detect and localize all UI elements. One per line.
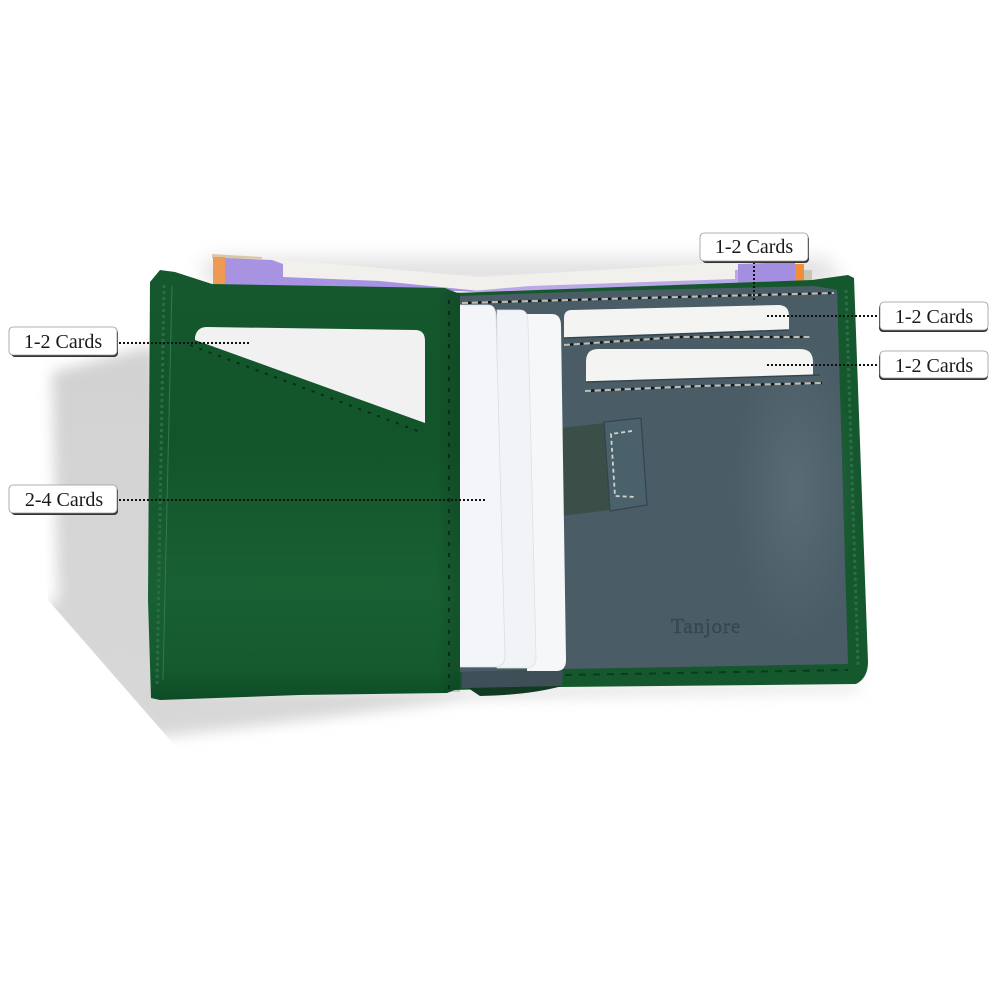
first card [458,305,505,667]
third card [527,314,566,671]
right stitching [846,290,858,665]
callout: right upper: 1-2 Cards [895,306,973,328]
note: cream edge [212,254,262,259]
suede band [562,423,610,516]
dark green lip [468,686,562,696]
left card [195,327,425,423]
callout: right lower: 1-2 Cards [895,355,973,377]
flap shape [148,270,460,700]
callout: left lower: 2-4 Cards [25,489,103,511]
fold shade [370,292,460,692]
pocket stitching [190,345,423,433]
brand emboss: Tanjore [671,614,741,638]
upper card [564,305,789,338]
leader line [753,262,755,300]
callout: left upper [9,327,249,357]
lining highlight [733,340,857,640]
callout: left upper: 1-2 Cards [24,331,102,353]
lower pocket edge [586,375,820,382]
note: purple right pattern [738,262,795,290]
callout: top: 1-2 Cards [715,236,793,258]
bottom strip [462,669,563,688]
note: white paper [225,257,800,292]
second card [497,310,536,668]
left seam highlight [163,286,172,680]
note: orange edge [213,257,225,288]
tab stitching [611,431,636,497]
banknotes [212,254,812,292]
callout: right upper [767,302,988,332]
bottom stitching [565,670,848,675]
note: grey right edge [804,270,812,290]
drop shadow [40,345,470,738]
top stitching [462,293,834,303]
top shadow glow [205,258,845,285]
elastic tab [562,418,647,516]
lower slot stitching [585,383,822,391]
bottom right shadow [470,684,860,698]
leather tab [604,418,647,511]
left flap [148,270,460,700]
centre cards [458,305,566,696]
fold stitching [448,300,450,690]
leader line [767,364,880,366]
note: orange right edge [795,264,804,290]
back green leather [455,275,868,690]
callout: right lower [767,351,988,380]
upper pocket edge [564,330,789,338]
left seam stitching [157,285,164,685]
leader line [119,342,249,344]
leader line [119,499,485,501]
leader line [767,315,880,317]
callout: top [700,233,809,300]
grey lining [458,286,848,672]
right card slots [564,305,822,391]
note: purple right strip [460,262,795,292]
lower card [586,349,813,382]
upper slot stitching [564,337,810,345]
note: purple left pattern [225,258,480,291]
callout: left lower [9,485,485,515]
wallet back [455,275,868,690]
